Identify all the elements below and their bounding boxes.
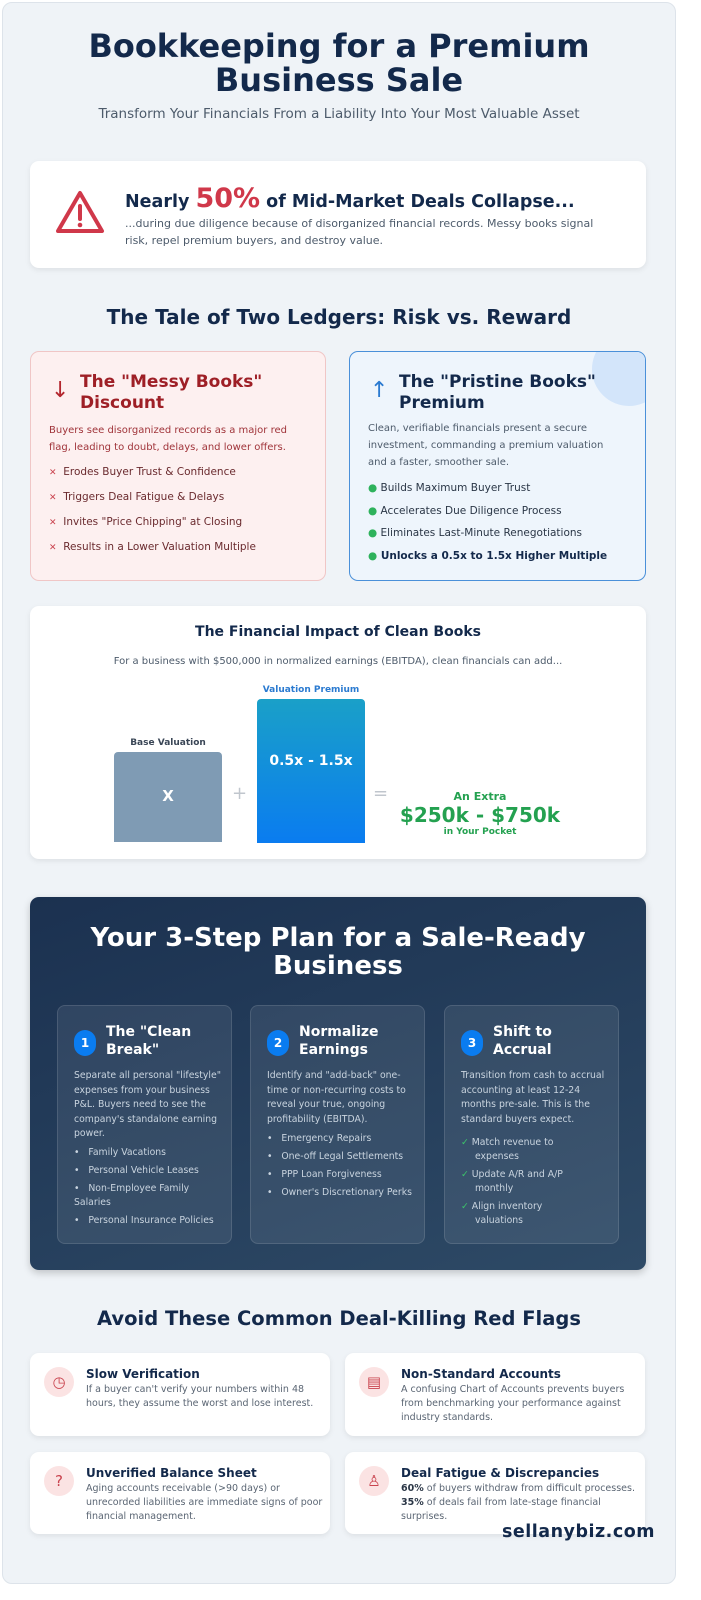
bar: valuation premium: Valuation Premium — [263, 685, 359, 695]
step 2: • PPP Loan Forgiveness — [267, 1169, 382, 1180]
pristine heading — [399, 372, 596, 413]
alert heading: Nearly 50% of Mid-Market Deals Collapse... — [125, 183, 575, 214]
brand footer: sellanybiz.com — [502, 1522, 655, 1542]
impact heading: The Financial Impact of Clean Books — [195, 624, 481, 640]
flag: deal fatigue: ♙ — [367, 1472, 381, 1490]
pristine list: ● Unlocks a 0.5x to 1.5x Higher Multiple — [368, 550, 607, 562]
step 1 — [57, 1005, 232, 1244]
messy heading: The "Messy Books" — [80, 372, 262, 392]
alert text: ...during due diligence because of disorganized financial records. Messy books signal risk, repel premium buyers, and destroy value. — [125, 217, 593, 247]
step 2: • Emergency Repairs — [267, 1133, 371, 1144]
title — [88, 27, 590, 99]
step 1: Separate all personal "lifestyle" expenses from your business P&L. Buyers need to see the company's standalone earning power. — [74, 1070, 221, 1139]
flag: deal fatigue — [345, 1452, 645, 1534]
result callout: $250k - $750k — [400, 803, 560, 827]
step 2: • One-off Legal Settlements — [267, 1151, 403, 1162]
step 3: Shift to — [493, 1024, 552, 1040]
flag: deal fatigue: Deal Fatigue & Discrepancies — [401, 1466, 599, 1480]
flag: non-standard accounts: Non-Standard Accounts — [401, 1367, 561, 1381]
step 1: • Non-Employee Family Salaries — [74, 1183, 189, 1208]
equals sign: = — [373, 783, 388, 804]
step 1: The "Clean — [106, 1024, 191, 1040]
pristine list: ● Builds Maximum Buyer Trust — [368, 482, 530, 494]
step 3 — [444, 1005, 619, 1244]
flag: unverified balance sheet: ? — [55, 1472, 63, 1490]
result callout — [400, 790, 560, 837]
flag: non-standard accounts — [345, 1353, 645, 1436]
flag: non-standard accounts: ▤ — [367, 1373, 381, 1391]
flag: deal fatigue: 60% of buyers withdraw from difficult processes. 35% of deals fail from late-stage financial surprises. — [401, 1483, 635, 1522]
flag: unverified balance sheet: Aging accounts receivable (>90 days) or unrecorded liabilities are immediate signs of poor financial management. — [86, 1483, 322, 1522]
messy list: ✕ Erodes Buyer Trust & Confidence — [49, 466, 236, 478]
title: Business Sale — [215, 61, 463, 99]
pristine heading: The "Pristine Books" — [399, 372, 596, 392]
result callout: An Extra — [454, 790, 506, 803]
messy heading: Discount — [80, 393, 164, 413]
messy heading — [80, 372, 262, 413]
messy list: ✕ Triggers Deal Fatigue & Delays — [49, 491, 224, 503]
step 1: Break" — [106, 1042, 159, 1058]
step 3: 3 — [468, 1036, 476, 1050]
step 1: • Family Vacations — [74, 1147, 166, 1158]
alert card — [30, 161, 646, 268]
flag: slow verification — [30, 1353, 330, 1436]
pristine list — [368, 482, 607, 562]
bar: valuation premium: 0.5x - 1.5x — [269, 753, 353, 769]
icon: warning — [56, 190, 104, 233]
plan heading: Your 3-Step Plan for a Sale-Ready — [90, 923, 586, 953]
step 2: 2 — [274, 1036, 282, 1050]
flag: slow verification: ◷ — [52, 1373, 66, 1391]
pristine list: ● Eliminates Last-Minute Renegotiations — [368, 527, 582, 539]
step 2: Earnings — [299, 1042, 368, 1058]
plan heading — [90, 923, 586, 981]
bar: base valuation — [114, 738, 222, 842]
step 2: Identify and "add-back" one-time or non-recurring costs to reveal your true, ongoing profitability (EBITDA). — [267, 1070, 406, 1124]
step 2: Normalize — [299, 1024, 379, 1040]
step 2 — [250, 1005, 425, 1244]
subtitle: Transform Your Financials From a Liability Into Your Most Valuable Asset — [98, 106, 580, 122]
result callout: in Your Pocket — [444, 827, 516, 837]
plus sign: + — [232, 783, 247, 804]
messy text: Buyers see disorganized records as a major red flag, leading to doubt, delays, and lower offers. — [49, 425, 287, 453]
bar: base valuation: X — [162, 787, 174, 805]
pristine text: Clean, verifiable financials present a secure investment, commanding a premium valuation and a faster, smoother sale. — [368, 423, 603, 468]
panel: pristine books — [349, 351, 646, 581]
step 3: ✓ Align inventory valuations — [461, 1201, 542, 1226]
messy list — [49, 466, 256, 553]
step 3: ✓ Update A/R and A/P monthly — [461, 1169, 563, 1194]
panel: 3-step plan — [30, 897, 646, 1270]
bar: valuation premium — [257, 685, 365, 843]
step 1: • Personal Vehicle Leases — [74, 1165, 199, 1176]
step 1: • Personal Insurance Policies — [74, 1215, 214, 1226]
icon: down arrow: ↓ — [51, 378, 69, 403]
step 1: 1 — [81, 1036, 89, 1050]
impact subtitle: For a business with $500,000 in normalized earnings (EBITDA), clean financials can add... — [114, 656, 562, 667]
messy list: ✕ Invites "Price Chipping" at Closing — [49, 516, 242, 528]
flag: unverified balance sheet: Unverified Balance Sheet — [86, 1466, 257, 1480]
step 2: • Owner's Discretionary Perks — [267, 1187, 412, 1198]
icon: up arrow: ↑ — [370, 378, 388, 403]
flag: slow verification: If a buyer can't verify your numbers within 48 hours, they assume the worst and lose interest. — [86, 1384, 313, 1409]
pristine list: ● Accelerates Due Diligence Process — [368, 504, 562, 516]
step 3: Transition from cash to accrual accounting at least 12-24 months pre-sale. This is the standard buyers expect. — [461, 1070, 604, 1124]
plan heading: Business — [273, 951, 403, 981]
section heading: two ledgers: The Tale of Two Ledgers: Risk vs. Reward — [107, 305, 571, 329]
flag: slow verification: Slow Verification — [86, 1367, 200, 1381]
flag: unverified balance sheet — [30, 1452, 330, 1534]
step 3: ✓ Match revenue to expenses — [461, 1137, 553, 1162]
bar: base valuation: Base Valuation — [130, 738, 206, 748]
step 3: Accrual — [493, 1042, 552, 1058]
pristine heading: Premium — [399, 393, 485, 413]
messy list: ✕ Results in a Lower Valuation Multiple — [49, 541, 256, 553]
flag: non-standard accounts: A confusing Chart of Accounts prevents buyers from benchmarking your performance against industry standards. — [401, 1384, 624, 1423]
panel: financial impact — [30, 606, 646, 859]
title: Bookkeeping for a Premium — [88, 27, 590, 65]
panel: messy books — [30, 351, 326, 581]
section heading: red flags: Avoid These Common Deal-Killing Red Flags — [97, 1307, 581, 1330]
